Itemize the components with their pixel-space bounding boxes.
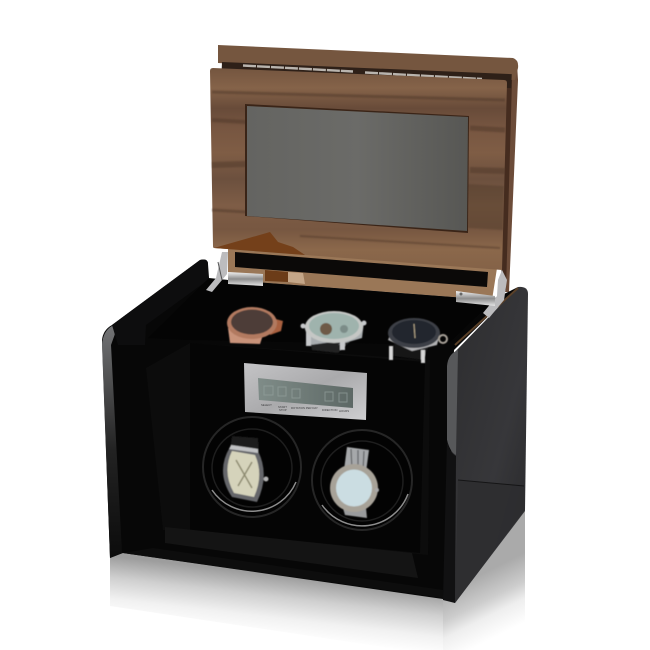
- watch: silver skeleton: [300, 311, 366, 353]
- control panel: [244, 363, 367, 420]
- lid side edge: [502, 64, 518, 292]
- front frame: [102, 260, 518, 600]
- button labels: DIRECTION: [322, 408, 337, 412]
- bottom lip: [165, 527, 418, 578]
- hinge: right: [456, 270, 507, 318]
- hinge strip on lid: [221, 62, 512, 88]
- button labels: STOP: [279, 408, 287, 412]
- tray rim highlight: [455, 288, 518, 345]
- top left rim: [112, 260, 208, 345]
- watch: rose gold: [227, 307, 283, 344]
- winder: right: [312, 430, 412, 530]
- left gloss edge: [102, 320, 122, 558]
- lid gloss reflection: [214, 232, 305, 255]
- recess velvet: [146, 343, 430, 555]
- button labels: HOURS: [339, 409, 349, 413]
- button labels: SELECT: [261, 403, 272, 407]
- lid top edge: [218, 45, 518, 80]
- button labels: [261, 403, 349, 413]
- viewing window: [245, 104, 469, 233]
- dark lining strip: [235, 252, 488, 287]
- winder: left: [203, 417, 301, 517]
- button labels: START: [278, 405, 287, 409]
- lid lower panel: [228, 248, 497, 300]
- lid face wood: [210, 68, 507, 270]
- watch in left winder: [223, 436, 268, 502]
- lid: [210, 45, 518, 300]
- button labels: ROTATION PER DAY: [291, 406, 318, 410]
- floor reflection: [110, 505, 525, 650]
- right side panel: [443, 287, 528, 603]
- right gloss edge: [447, 350, 458, 455]
- watch in right winder: [330, 447, 379, 518]
- interior tray: [148, 279, 498, 345]
- watch: dark dial: [388, 318, 447, 363]
- lcd display: [258, 378, 353, 408]
- box body: [102, 260, 528, 603]
- hinge: left: [206, 252, 263, 292]
